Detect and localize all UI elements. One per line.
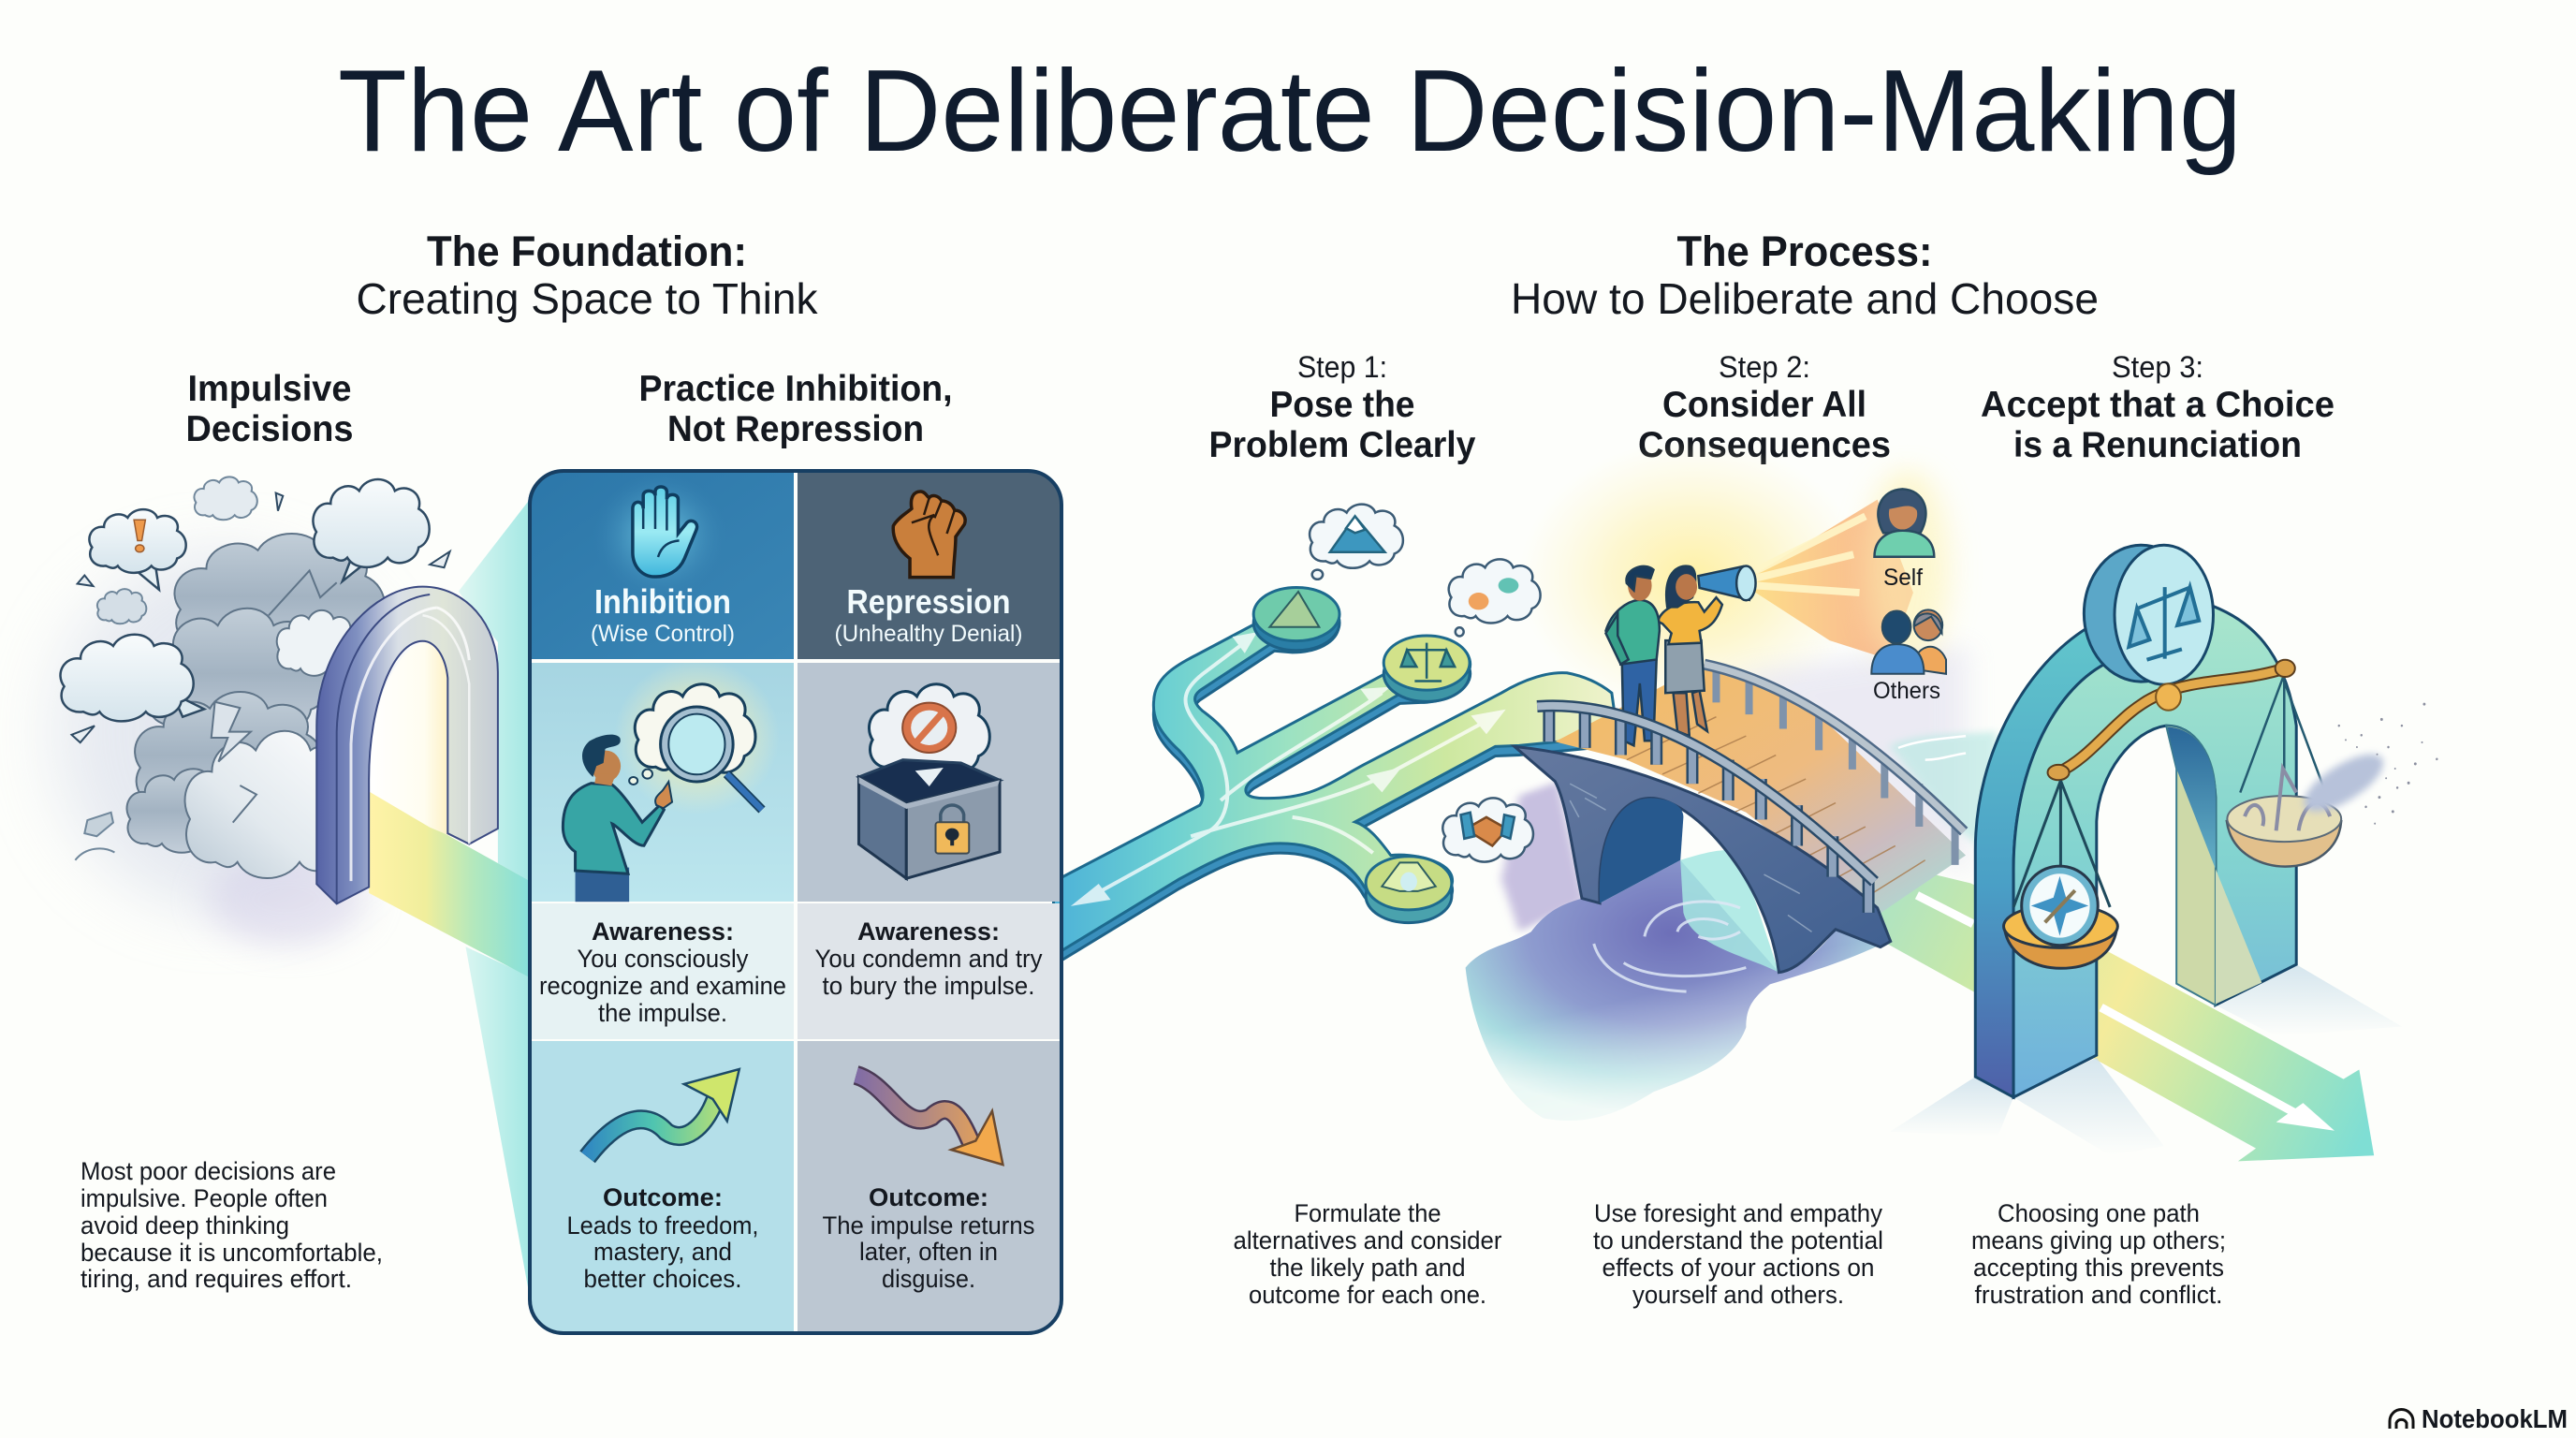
heading: practice inhibition xyxy=(638,369,953,449)
icons: outcome arrows xyxy=(588,1069,1003,1165)
arrow highlight xyxy=(1917,895,2303,1117)
text: step 3 description xyxy=(1971,1199,2226,1309)
icon: others xyxy=(1871,609,1946,674)
text: inhibition awareness: the impulse. xyxy=(598,999,727,1027)
icon: archway xyxy=(316,587,498,903)
bridge deck xyxy=(1555,665,1966,915)
heading: practice inhibition: Practice Inhibition, xyxy=(638,369,953,409)
text: step 1 description xyxy=(1234,1199,1501,1309)
person: man xyxy=(1605,566,1660,745)
panel header text: inhibition: Inhibition xyxy=(594,582,731,621)
icon: clenched fist xyxy=(893,492,965,578)
icon: speech bubble with exclamation mark xyxy=(89,509,186,590)
arrow: rising outcome xyxy=(588,1069,739,1157)
text: impulsive description xyxy=(80,1157,383,1293)
section heading: the process: The Process: xyxy=(1677,227,1932,275)
text: repression outcome: disguise. xyxy=(882,1265,975,1293)
node: mountain goal xyxy=(1253,587,1339,651)
cell: repression image xyxy=(798,663,1061,902)
heading: step 2: Consider All xyxy=(1662,385,1866,425)
illustration: archway with balance scale xyxy=(1975,545,2438,1097)
text: step 3 description: frustration and conflict. xyxy=(1975,1281,2222,1309)
heading: step 3: Accept that a Choice xyxy=(1981,385,2334,425)
text: inhibition awareness: recognize and examine xyxy=(539,972,786,1000)
illustration: storm of impulses and archway xyxy=(57,477,530,1299)
panel header text: repression xyxy=(835,582,1022,647)
heading: step 3: is a Renunciation xyxy=(2013,425,2302,465)
text: step 3 description: accepting this prevents xyxy=(1973,1254,2224,1282)
rays xyxy=(1752,500,1913,659)
arrow: falling outcome xyxy=(856,1075,1003,1165)
node: balance scale xyxy=(1383,636,1470,701)
icon: person examining thought xyxy=(563,658,780,902)
heading: practice inhibition: Not Repression xyxy=(667,409,924,449)
heading: impulsive decisions xyxy=(185,369,354,449)
text: step 1 description: the likely path and xyxy=(1269,1254,1466,1282)
balance beam xyxy=(2048,660,2295,780)
far railing xyxy=(1705,665,1964,865)
panel border xyxy=(530,471,1061,1333)
text: inhibition awareness xyxy=(539,917,786,1027)
left pan with compass xyxy=(2004,781,2117,968)
label: others: Others xyxy=(1873,678,1940,704)
icon: locked box with thought xyxy=(858,684,1000,878)
bridge stone arch xyxy=(1515,746,1891,973)
text: repression awareness: to bury the impulse. xyxy=(822,972,1035,1000)
thought bubble: mountain xyxy=(1310,505,1403,580)
label: self: Self xyxy=(1883,565,1923,591)
icon: small clouds and shards xyxy=(72,477,450,860)
icon: telescope xyxy=(1698,565,1756,600)
heading: step 2: Consequences xyxy=(1638,425,1891,465)
section heading: the process xyxy=(1511,227,2099,323)
illustration: bridge with two people xyxy=(1515,565,1966,973)
text: inhibition outcome: Leads to freedom, xyxy=(567,1211,758,1240)
text: inhibition outcome: Outcome: xyxy=(603,1183,723,1211)
thought bubble: handshake xyxy=(1442,798,1533,862)
node: compass-like option xyxy=(1366,857,1452,923)
panel header text: inhibition: (Wise Control) xyxy=(591,621,735,647)
text: inhibition awareness: Awareness: xyxy=(592,917,734,946)
text: step 3 description: means giving up others; xyxy=(1971,1226,2226,1255)
text: step 3 description: Choosing one path xyxy=(1998,1199,2200,1227)
disc with scales xyxy=(2084,545,2213,684)
near railing xyxy=(1537,706,1874,913)
text: impulsive description: because it is uncomfortable, xyxy=(80,1239,383,1267)
text: repression outcome: later, often in xyxy=(859,1238,998,1266)
cell: inhibition outcome xyxy=(530,1041,794,1332)
heading: step 3 xyxy=(1981,350,2334,465)
text: step 1 description: outcome for each one. xyxy=(1249,1281,1486,1309)
panel header text: repression: Repression xyxy=(846,582,1011,621)
illustration: river under the bridge xyxy=(1466,440,1997,1121)
panel header text: inhibition xyxy=(591,582,735,647)
text: step 2 description: to understand the potential xyxy=(1593,1226,1883,1255)
person: woman with telescope xyxy=(1658,566,1722,736)
arch left outer face xyxy=(1975,628,2105,1097)
heading: step 1: Step 1: xyxy=(1297,350,1387,384)
heading: step 2: Step 2: xyxy=(1719,350,1810,384)
heading: step 1: Problem Clearly xyxy=(1209,425,1476,465)
text: impulsive description: tiring, and requires effort. xyxy=(80,1265,352,1293)
heading: step 2 xyxy=(1638,350,1891,465)
text: repression outcome: The impulse returns xyxy=(822,1211,1035,1240)
illustration: branching road xyxy=(1054,505,1617,965)
text: impulsive description: avoid deep thinking xyxy=(80,1211,289,1240)
icon: self xyxy=(1874,489,1934,557)
text: step 2 description: yourself and others. xyxy=(1632,1281,1844,1309)
text: repression outcome: Outcome: xyxy=(869,1183,988,1211)
text: step 1 description: Formulate the xyxy=(1294,1199,1442,1227)
arch front face xyxy=(2013,607,2296,1097)
section heading: the foundation xyxy=(356,227,818,323)
section heading: the foundation: The Foundation: xyxy=(427,227,747,275)
thought bubble: conversation xyxy=(1449,559,1541,636)
text: repression awareness: Awareness: xyxy=(857,917,1000,946)
text: step 1 description: alternatives and consider xyxy=(1234,1226,1501,1255)
panel: inhibition versus repression xyxy=(528,471,1061,1333)
text: inhibition outcome xyxy=(567,1183,758,1293)
arch inner side xyxy=(2166,726,2261,1005)
section heading: the foundation: Creating Space to Think xyxy=(356,274,818,323)
cell: inhibition image xyxy=(530,663,794,902)
heading: step 1 xyxy=(1209,350,1476,465)
cell: repression awareness xyxy=(798,903,1061,1039)
notebooklm logo: NotebookLM xyxy=(2422,1404,2568,1433)
text: repression outcome xyxy=(822,1183,1035,1293)
heading: impulsive decisions: Impulsive xyxy=(187,369,352,409)
title: The Art of Deliberate Decision-Making xyxy=(338,47,2242,176)
heading: impulsive decisions: Decisions xyxy=(185,409,354,449)
heading: step 3: Step 3: xyxy=(2112,350,2203,384)
cell: inhibition awareness xyxy=(530,903,794,1039)
icon: open hand xyxy=(593,473,726,597)
text: impulsive description: impulsive. People often xyxy=(80,1184,328,1212)
text: repression awareness xyxy=(814,917,1043,1000)
text: step 2 description: Use foresight and empathy xyxy=(1594,1199,1882,1227)
text: inhibition awareness: You consciously xyxy=(577,945,749,973)
road flow arrows xyxy=(1077,635,1501,903)
text: step 2 description: effects of your actions on xyxy=(1603,1254,1874,1282)
icon: speech bubble left xyxy=(61,635,204,721)
text: inhibition outcome: mastery, and xyxy=(593,1238,732,1266)
icon: speech bubble top right xyxy=(313,479,430,581)
icons in panel upper half xyxy=(563,473,1000,902)
cell: repression outcome xyxy=(798,1041,1061,1332)
heading: step 1: Pose the xyxy=(1269,385,1415,425)
right pan: fading alternatives xyxy=(2227,678,2438,867)
illustration: viewing rays and people icons xyxy=(1752,468,1949,674)
text: inhibition outcome: better choices. xyxy=(584,1265,741,1293)
text: impulsive description: Most poor decisions are xyxy=(80,1157,336,1185)
text: step 2 description xyxy=(1593,1199,1883,1309)
panel header text: repression: (Unhealthy Denial) xyxy=(835,621,1022,647)
column header: inhibition xyxy=(528,471,794,659)
text: repression awareness: You condemn and try xyxy=(814,945,1043,973)
illustration: rainbow path arrow xyxy=(1872,859,2402,1161)
icon: storm cloud mass xyxy=(127,534,385,878)
column header: repression xyxy=(798,471,1061,659)
section heading: the process: How to Deliberate and Choose xyxy=(1511,274,2099,323)
